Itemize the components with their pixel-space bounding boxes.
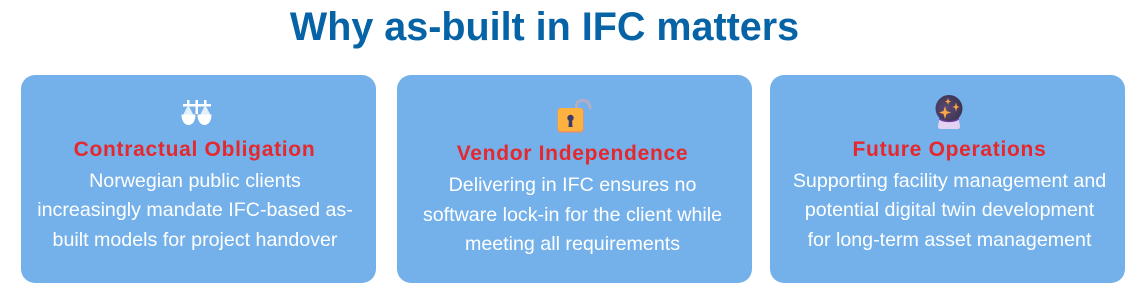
body text: potential digital twin development: [805, 199, 1094, 221]
icon: crystal ball: [936, 95, 962, 129]
body text: [37, 170, 353, 250]
body text: [423, 174, 722, 255]
body text: Delivering in IFC ensures no: [449, 174, 696, 196]
body text: increasingly mandate IFC-based as-: [37, 199, 353, 221]
heading: Future Operations: [853, 138, 1046, 161]
body text: for long-term asset management: [808, 228, 1091, 250]
body text: meeting all requirements: [465, 233, 680, 255]
body text: built models for project handover: [53, 228, 337, 250]
heading: Vendor Independence: [457, 142, 688, 165]
panel: contractual obligation: [21, 75, 376, 283]
title: Why as-built in IFC matters: [290, 5, 799, 49]
icon: open padlock: [558, 99, 592, 132]
icon: balance scales: [182, 100, 212, 125]
heading: Contractual Obligation: [74, 138, 315, 161]
body text: [793, 170, 1106, 250]
panel: future operations: [770, 75, 1125, 283]
body text: software lock-in for the client while: [423, 204, 722, 226]
panel: vendor independence: [397, 75, 752, 283]
body text: Norwegian public clients: [89, 170, 301, 192]
body text: Supporting facility management and: [793, 170, 1106, 192]
